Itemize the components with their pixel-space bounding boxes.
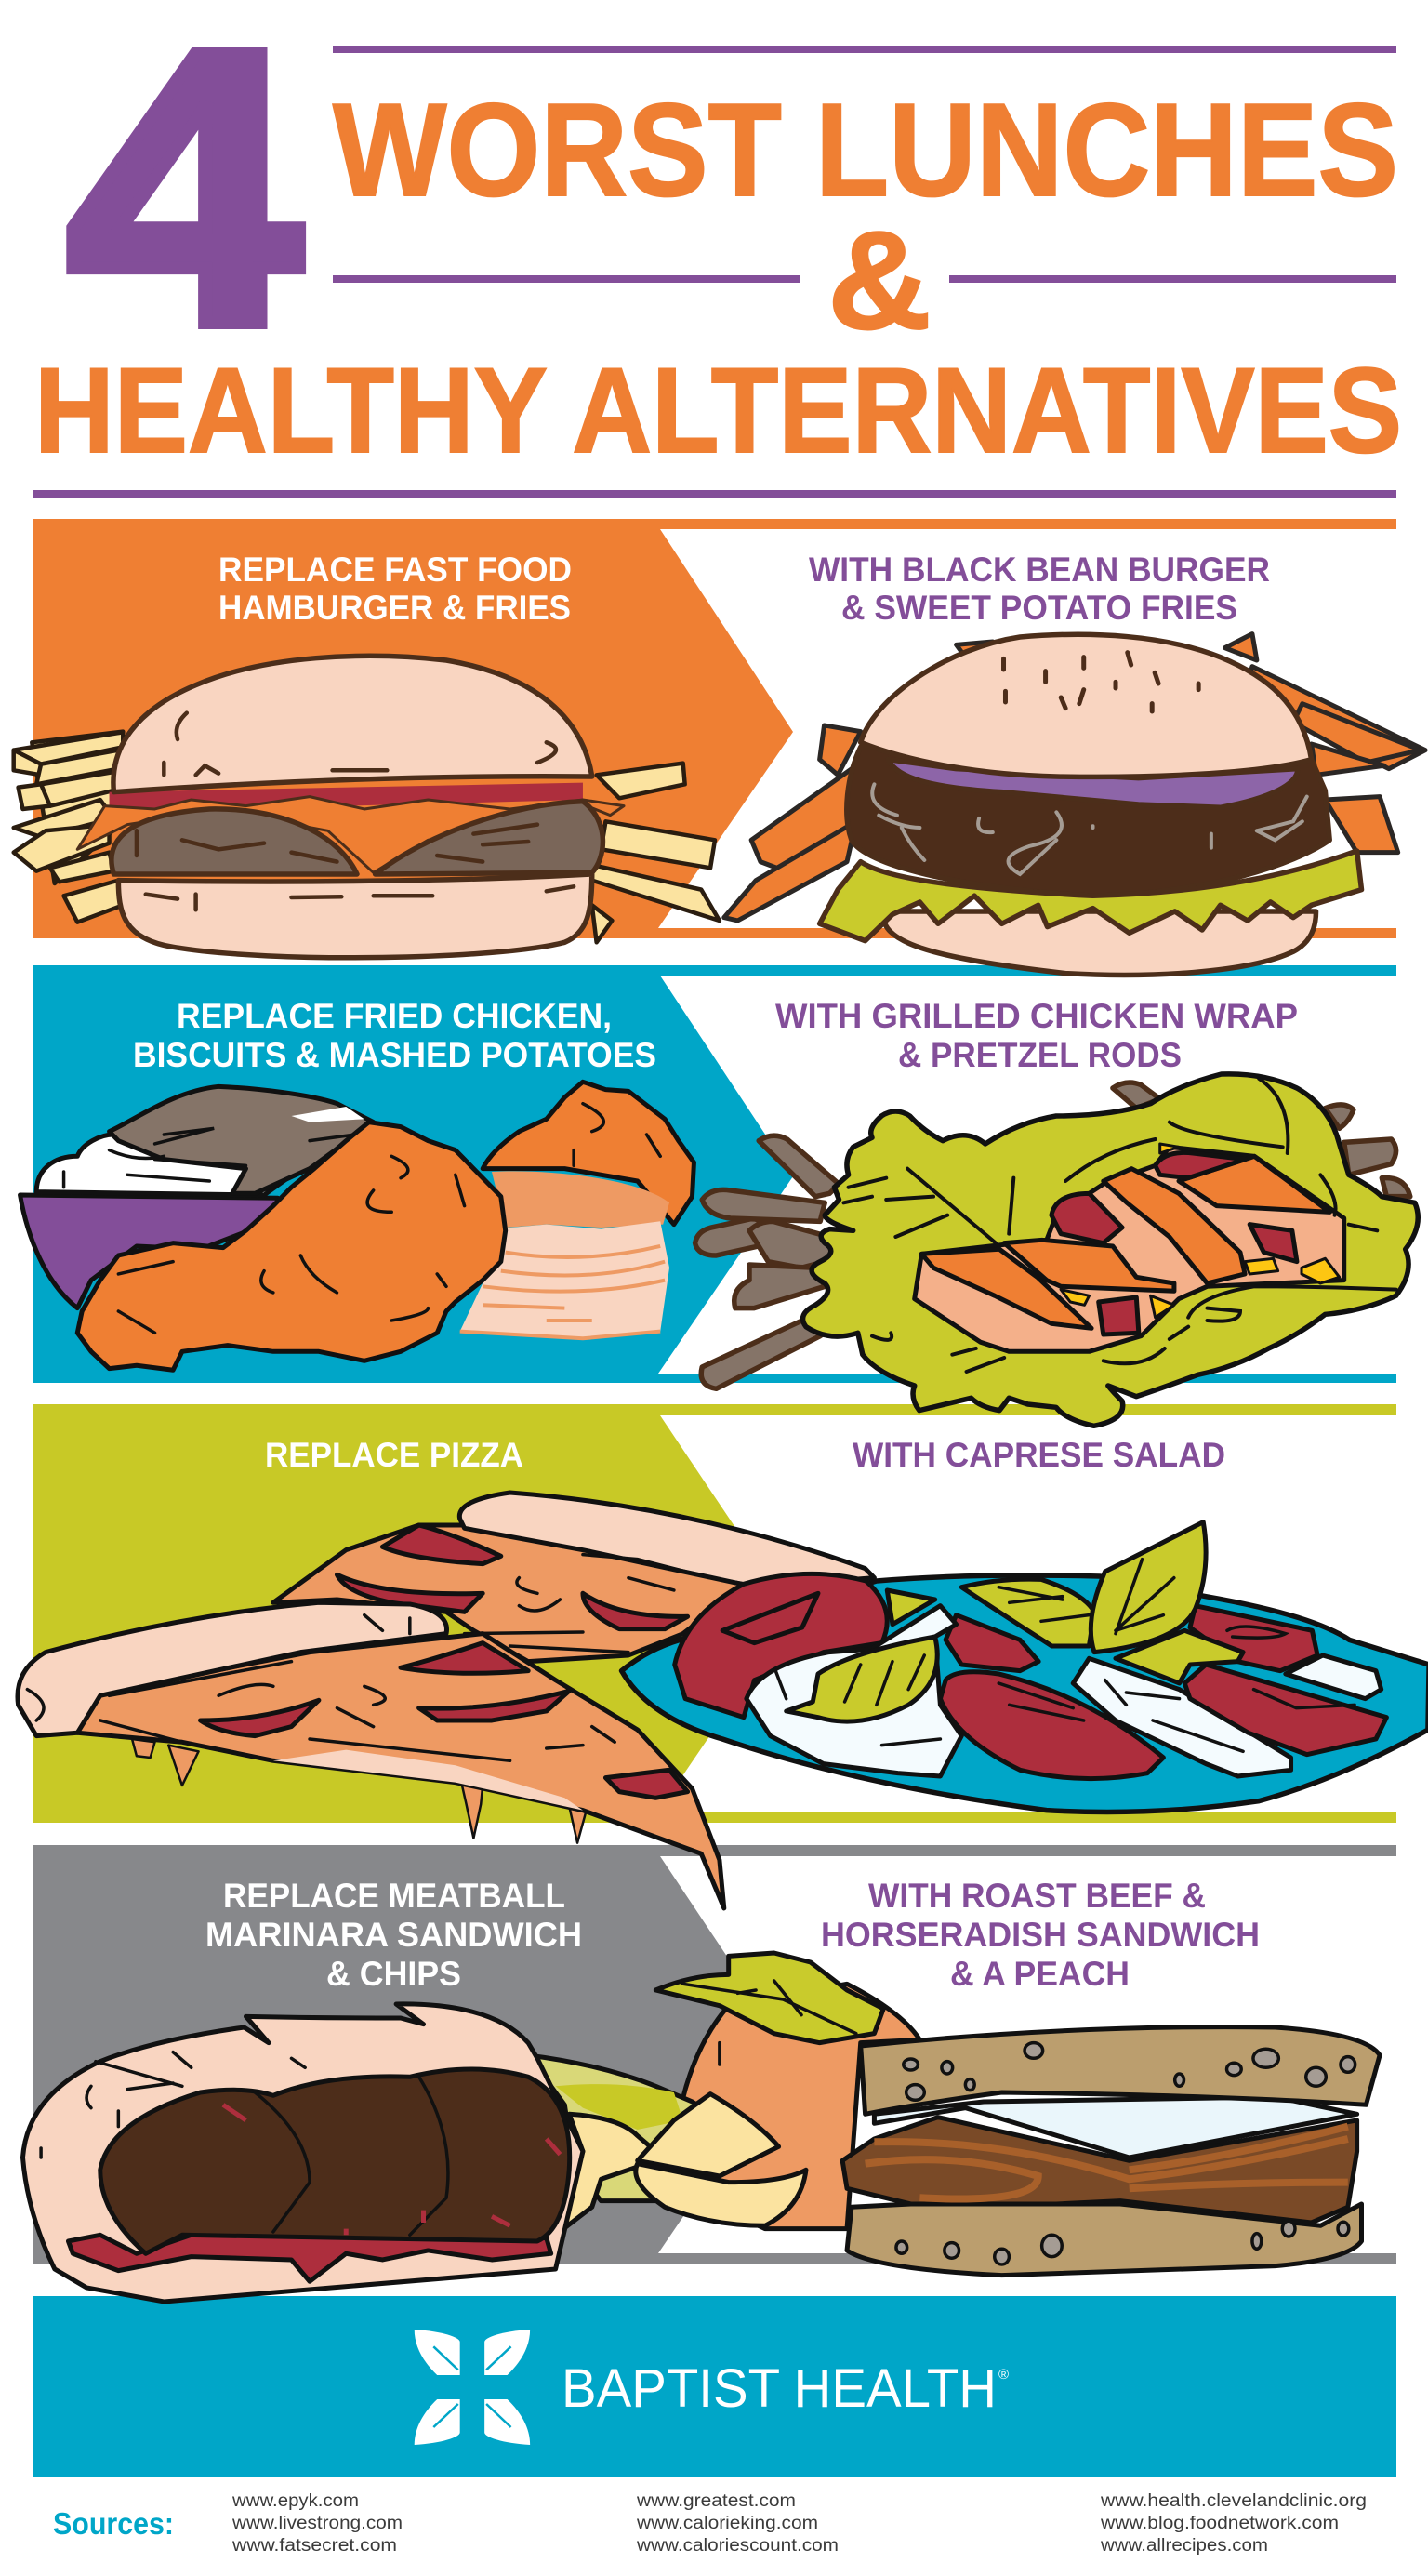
sources column 1: www.epyk.com [231, 2491, 359, 2511]
illustration: roast beef and horseradish sandwich [842, 2027, 1380, 2276]
sources column 3: www.allrecipes.com [1100, 2536, 1268, 2556]
panel 1 labels: & SWEET POTATO FRIES [841, 589, 1237, 627]
sources label: Sources: [53, 2506, 174, 2541]
panel 3 labels: REPLACE PIZZA [265, 1436, 523, 1474]
sources column 1: www.fatsecret.com [231, 2536, 397, 2556]
panel 3 labels: WITH CAPRESE SALAD [853, 1436, 1225, 1474]
panel: chicken background [33, 965, 1396, 1383]
illustration: hamburger and fries [14, 656, 720, 958]
panel 3 labels [265, 1436, 1225, 1474]
illustration: caprese salad plate [622, 1522, 1428, 1812]
panel 1 labels: HAMBURGER & FRIES [218, 589, 571, 627]
footer band [33, 2296, 1396, 2477]
panel 2 labels: WITH GRILLED CHICKEN WRAP [775, 997, 1298, 1035]
title block [33, 0, 1402, 498]
sources column 2: www.caloriescount.com [636, 2536, 839, 2556]
panel 2 labels: BISCUITS & MASHED POTATOES [133, 1036, 656, 1074]
icon: Baptist Health logo [415, 2330, 530, 2445]
panel 2 labels [133, 997, 1298, 1074]
panel 4 labels [205, 1877, 1260, 1993]
panel 1 labels: WITH BLACK BEAN BURGER [809, 551, 1270, 589]
illustration: black bean burger and sweet potato fries [724, 634, 1425, 975]
title ampersand: & [827, 202, 932, 358]
panel 1 labels: REPLACE FAST FOOD [218, 551, 572, 589]
sources column 3 [1100, 2491, 1367, 2556]
sources column 2: www.greatest.com [636, 2491, 796, 2511]
sources column 1: www.livestrong.com [231, 2514, 403, 2533]
panel 4 labels: WITH ROAST BEEF & [868, 1877, 1206, 1915]
illustration: pizza slices [18, 1493, 874, 1908]
panel: pizza background [33, 1404, 1396, 1823]
sources column 2 [636, 2491, 839, 2556]
panel 4 labels: & A PEACH [950, 1955, 1130, 1993]
panel: meatball background [33, 1845, 1396, 2264]
logo wordmark: BAPTIST HEALTH [562, 2358, 997, 2419]
logo wordmark: ® [998, 2367, 1009, 2383]
panel 4 labels: REPLACE MEATBALL [223, 1877, 565, 1915]
illustration: meatball marinara sandwich and chips [22, 2004, 806, 2302]
illustration: pretzel rods and grilled chicken wrap [695, 1074, 1418, 1426]
panel 2 labels: REPLACE FRIED CHICKEN, [177, 997, 612, 1035]
sources column 3: www.blog.foodnetwork.com [1100, 2514, 1339, 2533]
panel 4 labels: & CHIPS [326, 1955, 461, 1993]
panel 1 labels [218, 551, 1270, 627]
panel 4 labels: MARINARA SANDWICH [205, 1916, 582, 1954]
sources column 3: www.health.clevelandclinic.org [1100, 2491, 1367, 2511]
sources column 2: www.calorieking.com [636, 2514, 818, 2533]
sources column 1 [231, 2491, 403, 2556]
illustration: fried chicken, biscuits and mashed potatoes [20, 1082, 694, 1370]
illustration: peach [655, 1953, 919, 2229]
panel: burger background [33, 519, 1396, 938]
panel 2 labels: & PRETZEL RODS [898, 1036, 1182, 1074]
panel 4 labels: HORSERADISH SANDWICH [821, 1916, 1260, 1954]
